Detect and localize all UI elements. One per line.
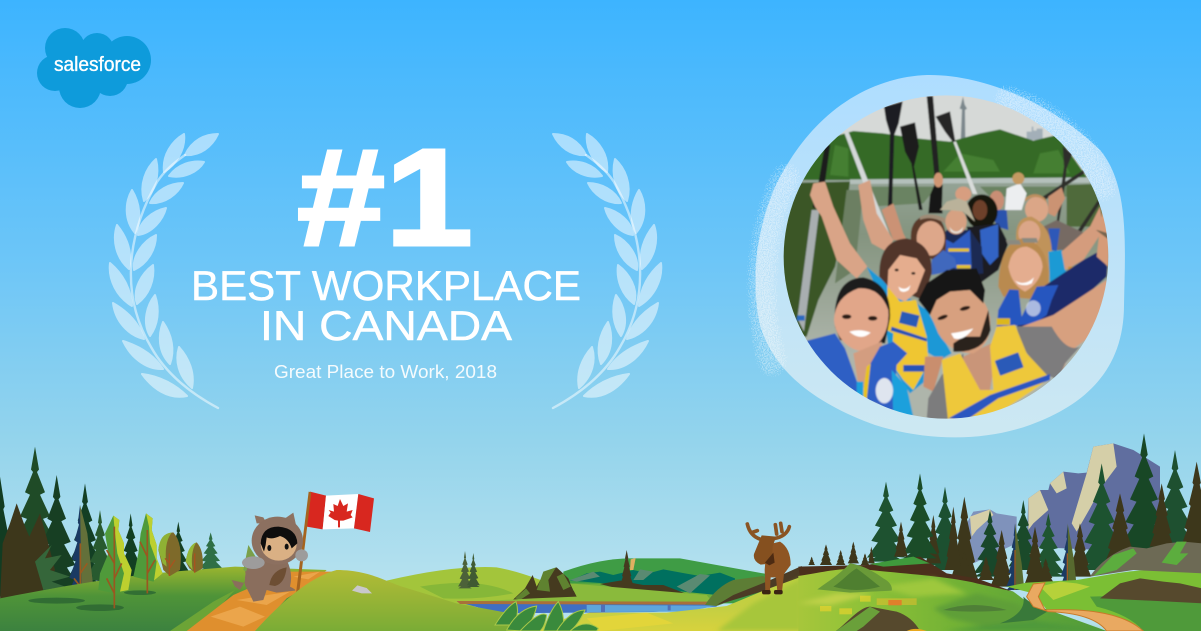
conifer forest right	[808, 433, 1201, 587]
rower centre left in yellow vest	[810, 182, 952, 393]
salesforce logo: salesforce	[54, 54, 141, 76]
front man in yellow vest	[918, 268, 1108, 423]
photo frame blob	[755, 75, 1125, 437]
landscape: right section	[798, 433, 1201, 631]
foreground mossy rock	[836, 607, 920, 631]
dark rock bush right	[1100, 578, 1201, 603]
mossy mound	[817, 563, 892, 593]
tree shadows	[28, 590, 156, 611]
rower behind right in blue shirt	[1016, 207, 1103, 283]
headline: #1: #1	[297, 121, 473, 275]
navy and olive tree	[66, 505, 94, 603]
foreground meadow	[513, 577, 802, 631]
navy trees	[1006, 523, 1077, 593]
photo trees	[800, 129, 1087, 185]
source line: Great Place to Work, 2018	[274, 361, 497, 382]
river	[457, 601, 717, 613]
salesforce logo	[37, 28, 151, 108]
moose	[747, 523, 791, 594]
photo sky and skyline	[838, 95, 1087, 178]
lone spruce	[621, 550, 633, 583]
grey-brown rock bush upper right	[1090, 542, 1201, 577]
team photo	[773, 93, 1113, 427]
orange path	[187, 572, 332, 631]
left laurel wreath	[110, 134, 218, 408]
photo water	[780, 177, 1113, 423]
ferns	[495, 602, 598, 631]
main left hill	[0, 567, 327, 631]
flag pole	[296, 492, 311, 594]
canadian flag	[307, 492, 374, 532]
small spruces	[458, 551, 480, 588]
front woman left	[807, 276, 914, 416]
mid green strip	[460, 583, 713, 603]
rock outcrop	[513, 567, 592, 600]
rower right, blonde with sunglasses	[997, 207, 1109, 328]
paddles	[797, 96, 1100, 332]
mountains	[967, 443, 1160, 563]
heading: best workplace in canada: BEST WORKPLACE	[191, 262, 581, 309]
far green hill	[563, 558, 767, 603]
landscape: centre section	[255, 523, 802, 631]
conifer forest left	[0, 447, 223, 600]
dark hedge	[798, 557, 1013, 592]
back row rowers	[928, 172, 1085, 252]
teal bushes	[570, 569, 735, 597]
shoreline bushes	[705, 576, 770, 606]
heading: best workplace in canada	[191, 262, 581, 349]
rower with raised arms	[858, 180, 957, 275]
winding trail	[1027, 583, 1143, 631]
mascot with flag	[232, 492, 374, 602]
right laurel wreath	[553, 134, 661, 408]
rower in hat	[940, 198, 983, 277]
light green hill	[387, 567, 580, 607]
flowers	[820, 596, 917, 614]
landscape: left section	[0, 447, 374, 631]
meadow	[798, 569, 1107, 631]
deciduous trees	[98, 513, 203, 608]
rowers: woman with curly hair	[966, 194, 1008, 283]
heading: best workplace in canada: IN CANADA	[260, 302, 512, 349]
mascot tail and body	[232, 563, 257, 590]
meadow right	[1007, 568, 1201, 631]
dark shoreline	[600, 581, 687, 594]
olive hill right of path with rock	[255, 570, 533, 631]
